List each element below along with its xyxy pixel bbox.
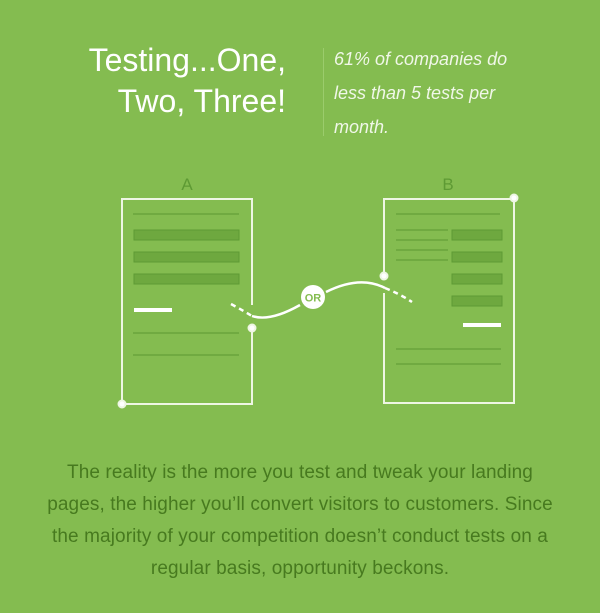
- body text: [47, 462, 553, 579]
- stat callout: less than 5 tests per: [334, 83, 495, 103]
- body text: pages, the higher you’ll convert visitors to customers. Since: [47, 494, 553, 515]
- title: [89, 42, 286, 119]
- stat callout: 61% of companies do: [334, 49, 507, 69]
- body text: the majority of your competition doesn’t conduct tests on a: [52, 526, 548, 547]
- stat callout: month.: [334, 117, 389, 137]
- connector curve with OR: OR: [305, 292, 321, 304]
- page B: [380, 194, 518, 403]
- title: Testing...One,: [89, 42, 286, 78]
- label B: B: [442, 175, 454, 194]
- title: Two, Three!: [118, 83, 286, 119]
- body text: The reality is the more you test and tweak your landing: [67, 462, 533, 483]
- body text: regular basis, opportunity beckons.: [151, 558, 449, 579]
- label A: A: [181, 175, 193, 194]
- stat callout: [334, 49, 507, 137]
- connector curve with OR: [231, 282, 412, 318]
- page A: [118, 199, 256, 408]
